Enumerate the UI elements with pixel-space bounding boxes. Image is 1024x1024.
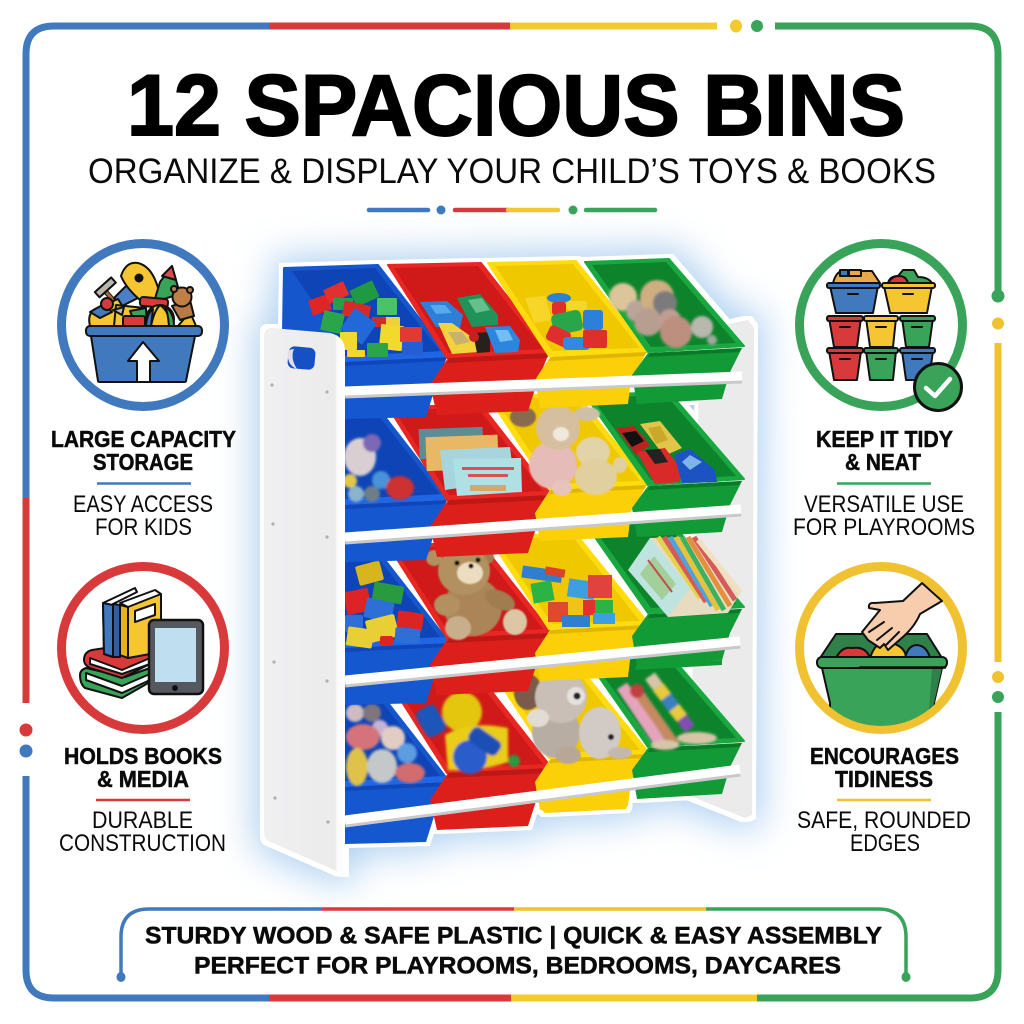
panel: large capacity storage bbox=[51, 244, 236, 541]
product photo: white shelf with 12 bins bbox=[264, 259, 754, 873]
icon: toy basket bbox=[62, 244, 224, 406]
row 3 bins bbox=[283, 520, 744, 705]
bottom banner text: STURDY WOOD & SAFE PLASTIC | QUICK & EASY ASSEMBLY bbox=[145, 922, 882, 950]
divider bbox=[96, 799, 190, 801]
divider bbox=[837, 482, 931, 485]
icon: stacked crates with check bbox=[800, 244, 962, 410]
text: DURABLE bbox=[92, 807, 193, 834]
divider bbox=[97, 482, 191, 485]
text bbox=[797, 807, 971, 857]
heading: HOLDS BOOKS bbox=[64, 743, 222, 769]
text bbox=[59, 807, 226, 857]
bottom banner text: PERFECT FOR PLAYROOMS, BEDROOMS, DAYCARES bbox=[194, 952, 841, 980]
bottom banner bracket bbox=[116, 909, 910, 982]
panel: holds books and media bbox=[59, 566, 226, 857]
heading: KEEP IT TIDY bbox=[816, 426, 953, 452]
rail 1 bbox=[345, 376, 742, 394]
text: EASY ACCESS bbox=[73, 491, 213, 518]
heading bbox=[51, 426, 236, 475]
frame dots bbox=[20, 20, 1004, 758]
left side panel with handle bbox=[264, 328, 345, 873]
title: 12 SPACIOUS BINS bbox=[127, 58, 905, 154]
heading: & MEDIA bbox=[97, 766, 189, 792]
rail 4 bbox=[345, 769, 740, 823]
rail 2 bbox=[345, 509, 741, 540]
row 4 bins bbox=[283, 654, 744, 844]
row 2 bins bbox=[283, 392, 744, 562]
text: CONSTRUCTION bbox=[59, 830, 226, 857]
subtitle: ORGANIZE & DISPLAY YOUR CHILD’S TOYS & BOOKS bbox=[88, 152, 936, 191]
heading bbox=[810, 743, 959, 792]
text: FOR PLAYROOMS bbox=[793, 514, 975, 541]
heading bbox=[64, 743, 222, 792]
panel: encourages tidiness bbox=[797, 566, 971, 857]
text: SAFE, ROUNDED bbox=[797, 807, 971, 834]
right side panel bbox=[690, 320, 754, 818]
row 1 bins bbox=[283, 259, 744, 419]
heading: ENCOURAGES bbox=[810, 743, 959, 769]
text: FOR KIDS bbox=[95, 514, 192, 541]
divider bbox=[837, 799, 931, 801]
title divider bbox=[369, 206, 655, 214]
heading: & NEAT bbox=[845, 449, 921, 475]
text: VERSATILE USE bbox=[804, 491, 964, 518]
heading bbox=[816, 426, 953, 475]
text bbox=[73, 491, 213, 541]
bottom banner text bbox=[145, 922, 882, 980]
heading: TIDINESS bbox=[835, 766, 933, 792]
icon: hand placing toys in bin bbox=[800, 566, 962, 740]
heading: LARGE CAPACITY bbox=[51, 426, 236, 452]
text bbox=[793, 491, 975, 541]
heading: STORAGE bbox=[93, 449, 193, 475]
text: EDGES bbox=[850, 830, 920, 857]
icon: books and tablet bbox=[62, 566, 224, 730]
rail 3 bbox=[345, 641, 740, 683]
panel: keep it tidy bbox=[793, 244, 975, 541]
